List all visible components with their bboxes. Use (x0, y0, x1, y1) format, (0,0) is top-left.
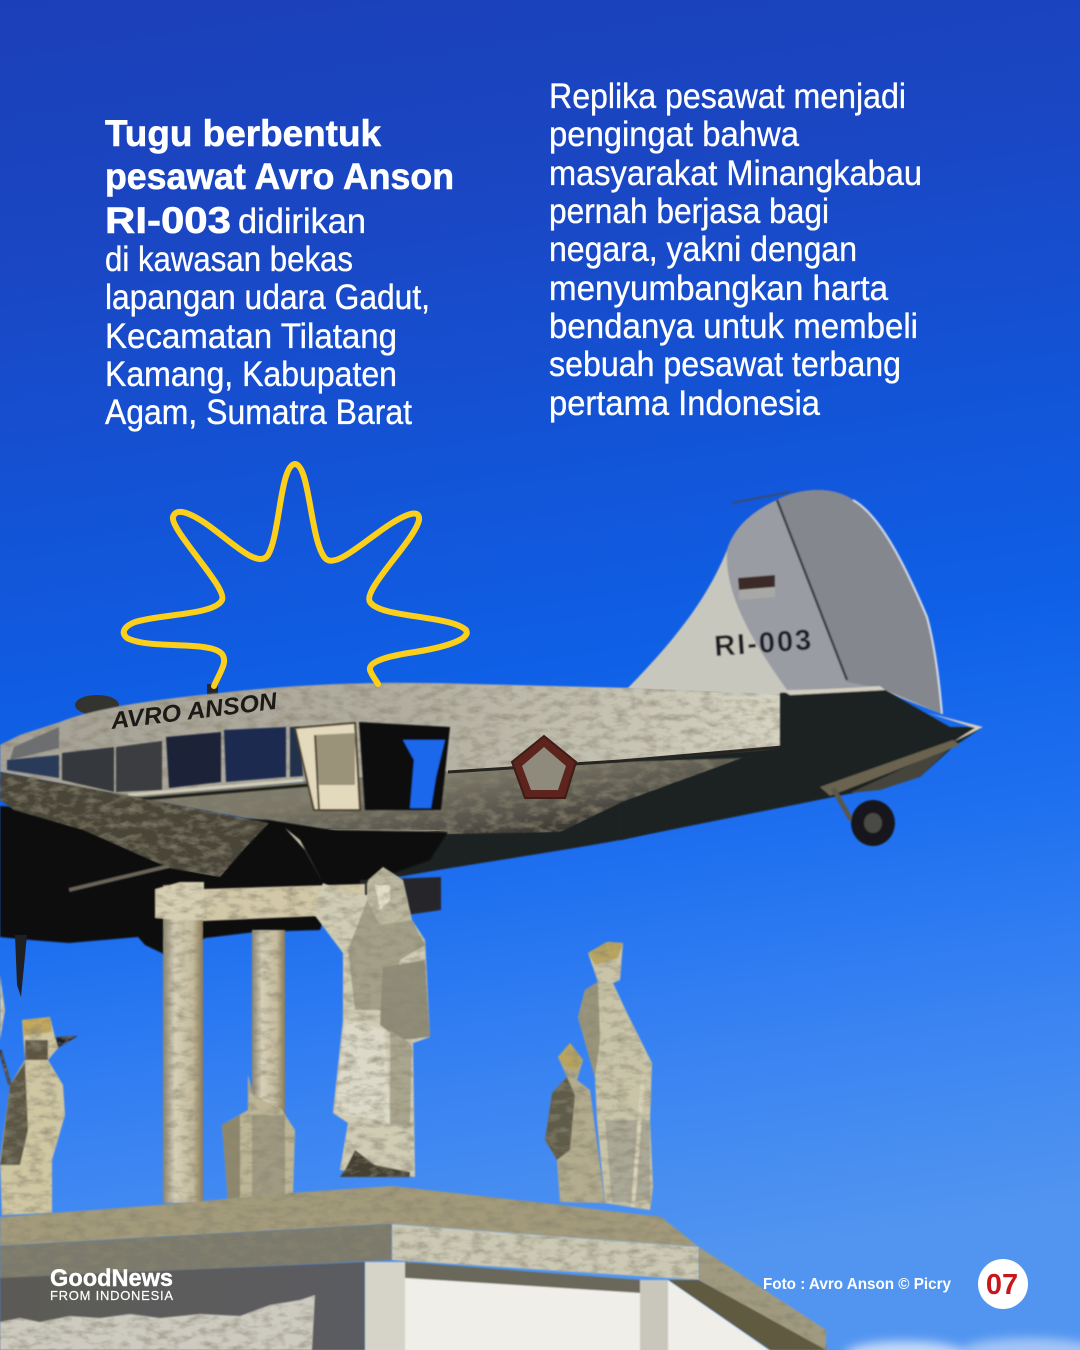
left text block: Kecamatan Tilatang (105, 317, 397, 356)
flag on tail (738, 575, 775, 600)
left text block: Agam, Sumatra Barat (105, 393, 412, 432)
right text block (549, 77, 922, 423)
right text block: sebuah pesawat terbang (549, 345, 901, 384)
fuselage dark underside (269, 747, 853, 886)
GoodNews logo: FROM INDONESIA (50, 1288, 173, 1303)
wing (0, 772, 269, 877)
left text block: pesawat Avro Anson (105, 156, 454, 197)
right text block: menyumbangkan harta (549, 269, 889, 308)
statue: woman raising arm (285, 828, 430, 1177)
propeller (15, 935, 27, 997)
left text block: RI-003 (105, 200, 231, 241)
right text block: Replika pesawat menjadi (549, 77, 906, 116)
pedestal side (668, 1280, 826, 1350)
GoodNews logo: GoodNews (50, 1265, 173, 1292)
left text block: di kawasan bekas (105, 240, 353, 279)
page number badge (978, 1259, 1028, 1309)
right text block: masyarakat Minangkabau (549, 154, 922, 193)
fuselage belly (128, 758, 743, 834)
pedestal base (0, 1186, 826, 1350)
statue: left figure (0, 975, 78, 1215)
tail fin (627, 490, 942, 714)
rear pillar (252, 930, 285, 1197)
beam (203, 884, 365, 921)
fuselage upper (0, 683, 782, 798)
right text block: bendanya untuk membeli (549, 307, 918, 346)
left text block: didirikan (238, 202, 366, 241)
fuselage name: AVRO ANSON (108, 688, 279, 735)
front pillar (163, 885, 203, 1203)
clouds (845, 1338, 1080, 1350)
left text block: lapangan udara Gadut, (105, 278, 430, 317)
roundel pentagon (512, 736, 576, 798)
tail cone dark (620, 686, 983, 840)
right text block: pernah berjasa bagi (549, 192, 829, 231)
pedestal top slab (0, 1186, 699, 1247)
dark mass under wing (0, 806, 448, 957)
photo credit: Foto : Avro Anson © Picry (763, 1276, 951, 1293)
tail registration: RI-003 (713, 624, 812, 663)
right text block: pengingat bahwa (549, 115, 799, 154)
statue behind pillar (222, 1075, 295, 1200)
left text block: Tugu berbentuk (105, 113, 381, 154)
left text block (105, 113, 454, 432)
decorative yellow star outline (124, 464, 467, 686)
right text block: negara, yakni dengan (549, 230, 857, 269)
white wall (365, 1262, 772, 1350)
top antenna dome (75, 695, 119, 715)
tail wheel (833, 788, 895, 846)
statue: child (545, 1043, 605, 1203)
right text block: pertama Indonesia (549, 384, 820, 423)
page number badge: 07 (986, 1269, 1018, 1301)
cabin windows (7, 727, 310, 800)
relief wall (0, 1262, 365, 1350)
open cockpit door (295, 722, 450, 810)
statue: standing man (578, 942, 653, 1210)
pedestal front band (0, 1224, 392, 1280)
monument pillars (155, 882, 365, 1203)
left text block: Kamang, Kabupaten (105, 355, 397, 394)
airplane monument (0, 490, 983, 997)
